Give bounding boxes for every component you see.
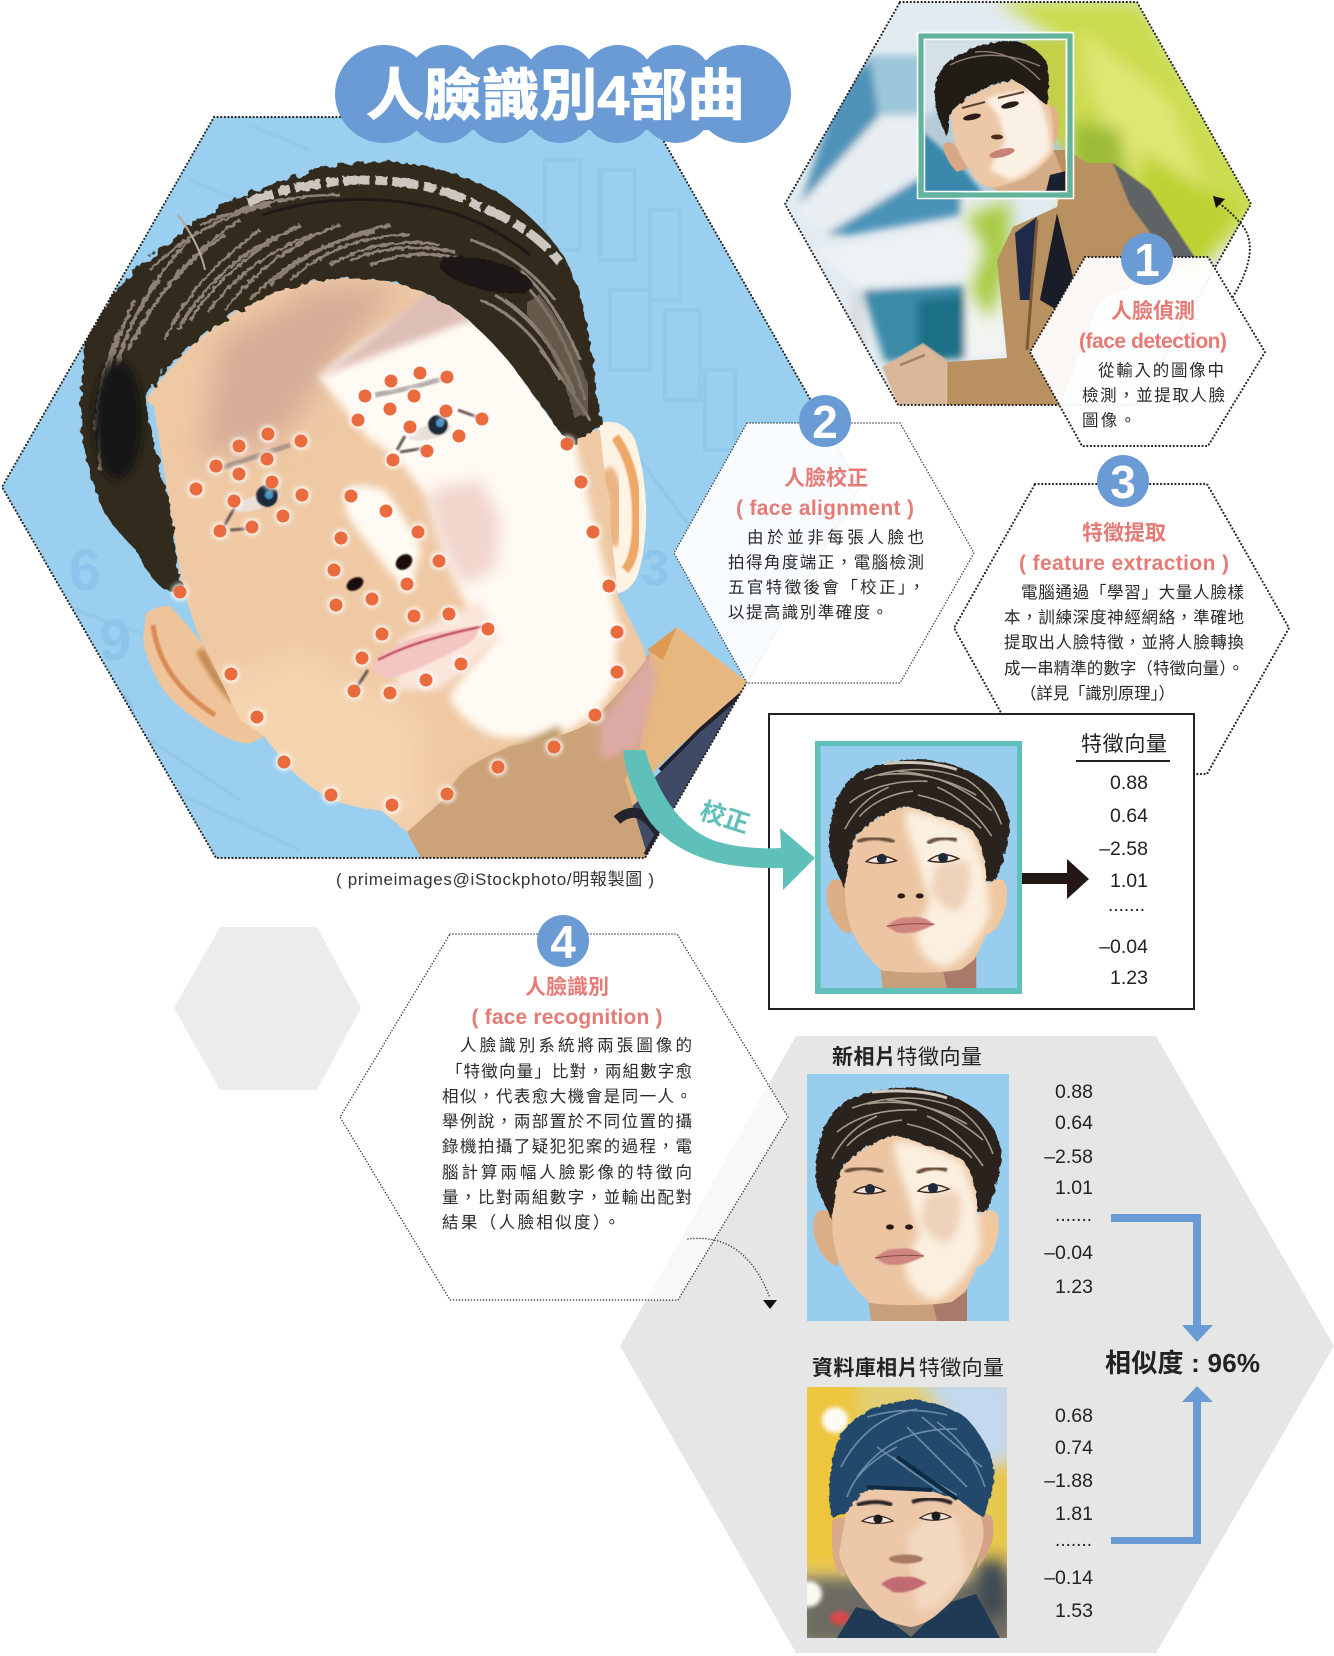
left ear [143,606,264,743]
new photo vector: 新相片特徵向量 [832,1045,982,1069]
panel 4: face recognition text: 相似，代表愈大機會是同一人。 [442,1087,692,1106]
panel 2: face alignment text: 以提高識別準確度。 [728,603,888,622]
badge 4: 4 [550,916,576,968]
database values: ....... [1055,1530,1092,1551]
panel 1 photo border [785,2,1251,405]
vector values: 1.23 [1110,967,1148,989]
jacket and neck [625,627,746,858]
panel 3: feature extraction text: 提取出人臉特徵，並將人臉轉換 [1004,633,1244,652]
new values: 0.64 [1055,1112,1093,1134]
new values [1044,1081,1093,1298]
database photo vector: 資料庫相片特徵向量 [812,1356,1004,1380]
database values: –0.14 [1044,1567,1093,1589]
main face hexagon photo: 0 [104,683,136,748]
panel 1: face detection text: 從輸入的圖像中 [1098,361,1224,380]
background data pattern [70,460,646,796]
aligned face photo [815,741,1022,994]
panel 2: face alignment text: ( face alignment ) [736,497,914,520]
panel 3: feature extraction text: 成一串精準的數字（特徵向量）。 [1004,659,1244,678]
face landmark dots [174,366,624,812]
vector values: –0.04 [1099,936,1148,958]
panel 4: face recognition text: ( face recognition ) [472,1006,662,1029]
face skin [146,278,646,832]
main face hexagon photo [0,110,870,870]
badge 3 [1097,455,1149,508]
hair [81,162,602,593]
database photo face [807,1387,1007,1638]
new values: 0.88 [1055,1081,1093,1103]
panel 2: face alignment text: 由於並非每張人臉也 [747,528,924,547]
panel 3: feature extraction text: ( feature extraction ) [1019,552,1229,575]
panel 2: face alignment text: 拍得角度端正，電腦檢測 [728,553,924,572]
teal correction arrow [623,750,815,890]
new values: 1.01 [1055,1177,1093,1199]
gray hexagon: comparison background [620,1036,1334,1653]
new values: 1.23 [1055,1276,1093,1298]
database values: 1.53 [1055,1600,1093,1622]
facial features: eyes nose lips [215,378,485,690]
panel 4: face recognition text: 錄機拍攝了疑犯犯案的過程，電 [442,1137,692,1156]
right ear [598,422,646,593]
green detection frame [918,32,1074,198]
panel 4: face recognition text: 舉例說，兩部置於不同位置的攝 [442,1112,692,1131]
database values: 1.81 [1055,1503,1093,1525]
badge 2 [799,395,851,448]
blue arrow up [1111,1386,1213,1544]
detection box contents [924,38,1065,191]
main face hexagon photo: 3 [641,540,669,596]
feature vector box [769,714,1194,1009]
database values: 0.68 [1055,1405,1093,1427]
vector values: 0.64 [1110,805,1148,827]
panel 1: face detection text: 檢測，並提取人臉 [1082,386,1225,405]
panel 3: feature extraction text: 本，訓練深度神經網絡，準確地 [1004,608,1244,627]
similarity result: 相似度 : 96% [1105,1348,1260,1378]
panel 3: feature extraction text: （詳見「識別原理」） [1020,684,1175,703]
panel 3: feature extraction text [954,455,1289,774]
badge 4 [537,915,589,968]
dotted arrow: panel 1 to photo [1213,196,1250,300]
database values [1044,1405,1093,1622]
black arrow [1022,859,1089,899]
badge 3: 3 [1110,456,1136,508]
vector values: 1.01 [1110,870,1148,892]
title banner: 人臉識別4部曲 [366,64,745,127]
new values: –2.58 [1044,1146,1093,1168]
database values: 0.74 [1055,1437,1093,1459]
new values: –0.04 [1044,1242,1093,1264]
panel 4: face recognition text: 人臉識別 [525,975,609,999]
database photo vector [796,1356,1093,1647]
database values: –1.88 [1044,1470,1093,1492]
blue arrow down [1111,1214,1213,1342]
panel 3: feature extraction text: 電腦通過「學習」大量人臉樣 [1021,583,1244,602]
main face hexagon photo: 9 [99,608,131,673]
panel 2: face alignment text: 人臉校正 [784,466,868,490]
new photo face [807,1074,1009,1321]
panel 4: face recognition text: 量，比對兩組數字，並輸出配對 [442,1188,692,1207]
panel 1: face detection text: (face detection) [1079,330,1227,353]
badge 1: 1 [1134,234,1160,286]
vector values: 特徵向量 [1081,733,1167,756]
vector values [1076,733,1170,989]
panel 1: face detection text: 人臉偵測 [1111,299,1195,323]
vector values: –2.58 [1099,838,1148,860]
teal correction arrow: 校正 [697,797,753,839]
panel 1 photo: face detection [780,0,1265,410]
panel 4: face recognition text: 結果（人臉相似度）。 [442,1213,620,1232]
main face hexagon photo: 6 [69,538,101,603]
blurred building [795,55,1005,370]
panel 2: face alignment text: 五官特徵後會「校正」， [728,578,925,597]
panel 1: face detection text: 圖像。 [1082,411,1136,430]
panel 3: feature extraction text: 特徵提取 [1082,522,1166,545]
badge 2: 2 [812,396,838,448]
panel 4: face recognition text: 人臉識別系統將兩張圖像的 [460,1036,692,1055]
gray hexagon: decorative small [174,927,361,1090]
person jacket [947,150,1152,405]
panel 2: face alignment text [674,395,974,683]
new values: ....... [1055,1205,1092,1226]
photo credit: ( primeimages@iStockphoto/明報製圖 ) [336,870,654,889]
panel 4: face recognition text [340,915,788,1300]
new photo vector [807,1045,1093,1321]
panel 1: face detection text [1030,233,1265,446]
blurred tree [965,0,1265,320]
badge 1 [1121,233,1173,286]
panel 4: face recognition text: 「特徵向量」比對，兩組數字愈 [446,1062,692,1081]
vector values: 0.88 [1110,772,1148,794]
panel 4: face recognition text: 腦計算兩幅人臉影像的特徵向 [442,1163,692,1182]
main hexagon dotted border [2,117,860,858]
vector values: ....... [1108,895,1145,916]
title banner [335,45,791,143]
dotted arrow: panel 4 to comparison [688,1238,777,1309]
